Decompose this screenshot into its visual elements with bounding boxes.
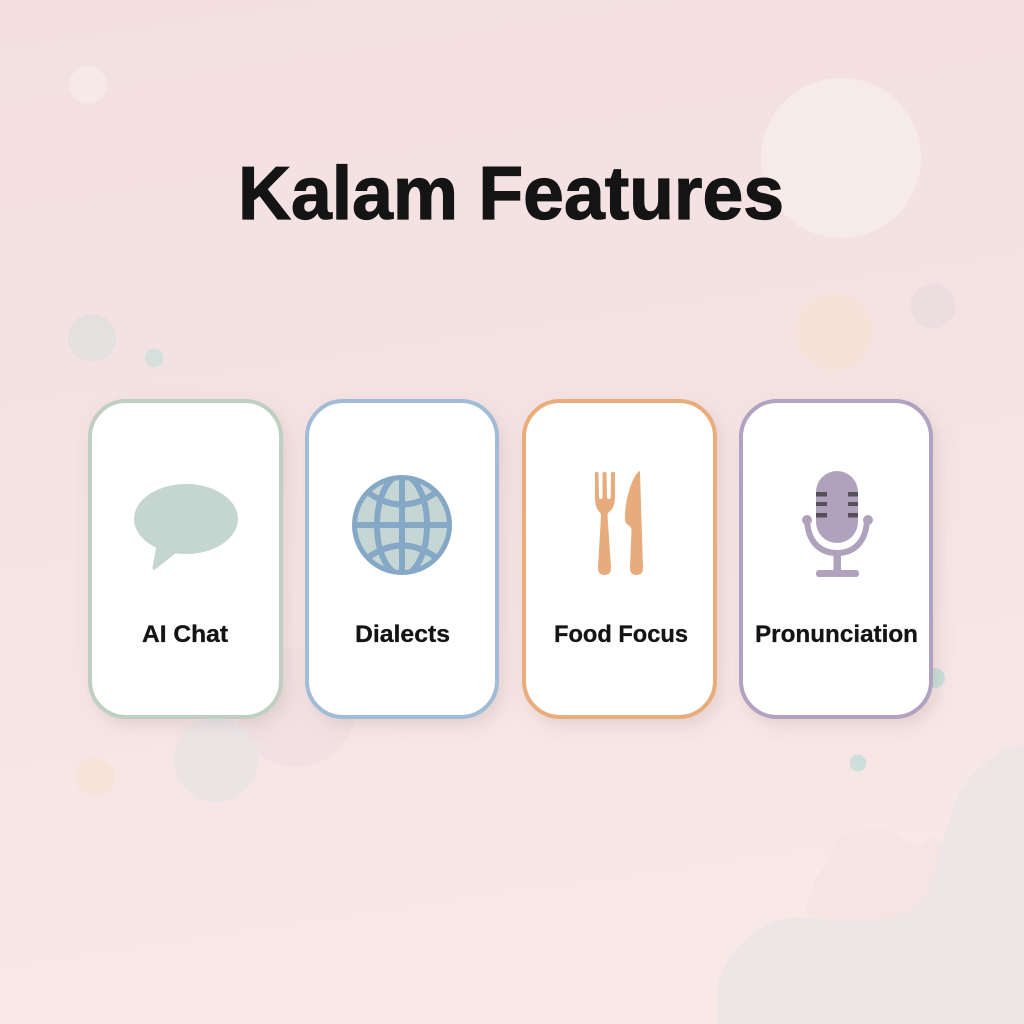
label: Food Focus: Food Focus <box>554 621 688 648</box>
icon: microphone <box>802 471 873 577</box>
title: Kalam Features <box>238 151 784 235</box>
icon: fork and knife <box>595 471 643 575</box>
card: AI Chat <box>90 401 281 717</box>
label: Dialects: Dialects <box>355 621 450 648</box>
icon: globe <box>352 475 452 575</box>
decorative bottom-right grey blob <box>717 745 1024 1024</box>
icon: speech bubble <box>134 484 238 570</box>
label: AI Chat: AI Chat <box>142 621 228 648</box>
label: Pronunciation: Pronunciation <box>755 621 918 648</box>
card: Dialects <box>307 401 497 717</box>
infographic canvas <box>68 164 956 802</box>
card: Food Focus <box>524 401 715 717</box>
decorative watercolor circles <box>68 66 956 802</box>
decorative bottom-right pink blob <box>807 828 945 925</box>
card: Pronunciation <box>741 401 931 717</box>
